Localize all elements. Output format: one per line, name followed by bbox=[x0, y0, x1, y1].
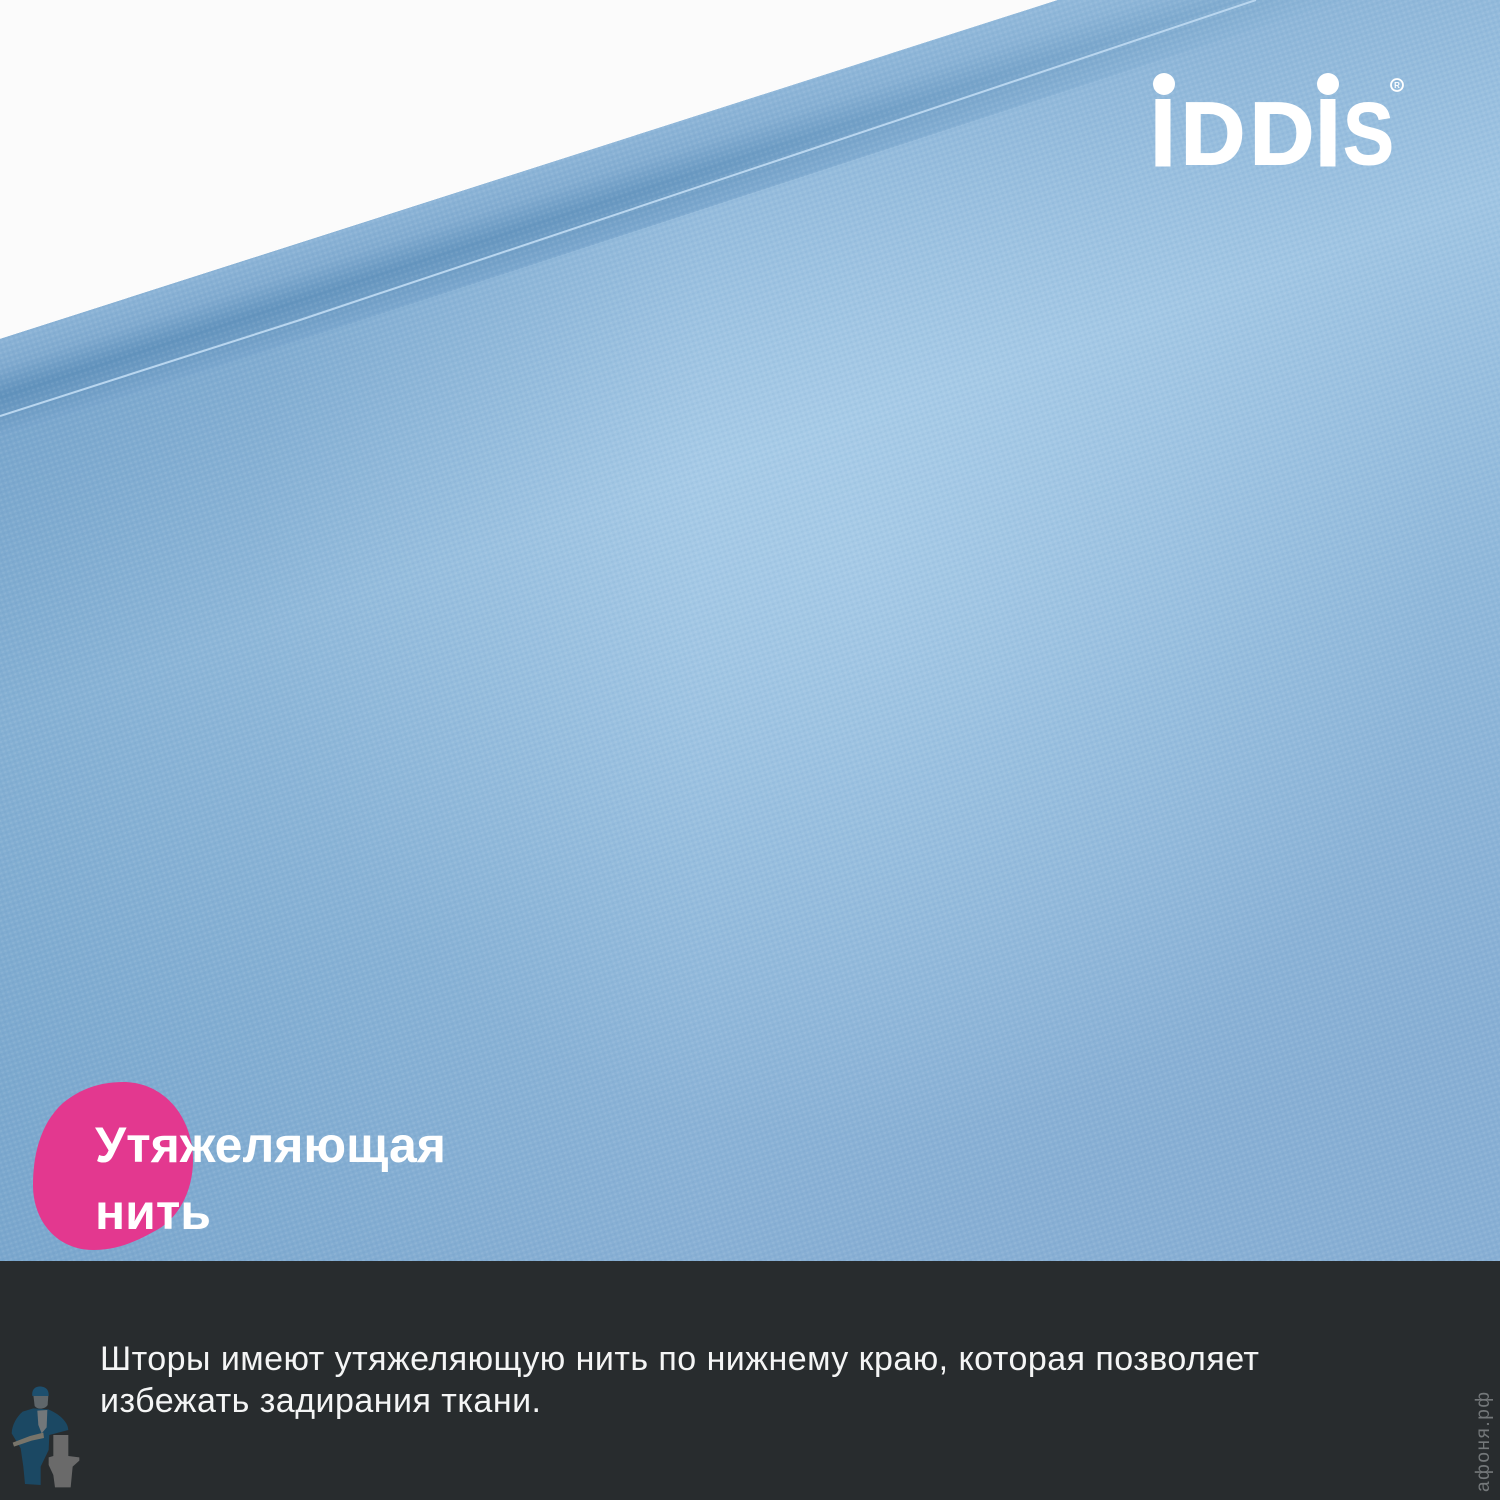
vertical watermark text: афоня.рф bbox=[1473, 1392, 1494, 1492]
logo: IDDIS: D bbox=[1181, 84, 1245, 183]
description text: Шторы имеют утяжеляющую нить по нижнему краю, которая позволяет bbox=[100, 1340, 1259, 1378]
pink blob accent bbox=[33, 1082, 193, 1250]
logo: IDDIS: R bbox=[1394, 81, 1400, 90]
logo: IDDIS: D bbox=[1250, 84, 1314, 183]
heading bbox=[95, 1117, 446, 1240]
logo: IDDIS: i bbox=[1150, 53, 1176, 192]
logo: IDDIS: i bbox=[1315, 53, 1341, 192]
heading: Утяжеляющая bbox=[95, 1117, 446, 1173]
description text bbox=[100, 1340, 1259, 1420]
logo: IDDIS bbox=[1153, 73, 1404, 166]
heading: нить bbox=[95, 1184, 211, 1240]
bottom dark band bbox=[0, 1261, 1500, 1500]
logo: IDDIS: S bbox=[1343, 84, 1394, 183]
description text: избежать задирания ткани. bbox=[100, 1382, 541, 1420]
icon: plumber with toilet watermark bbox=[12, 1387, 79, 1487]
